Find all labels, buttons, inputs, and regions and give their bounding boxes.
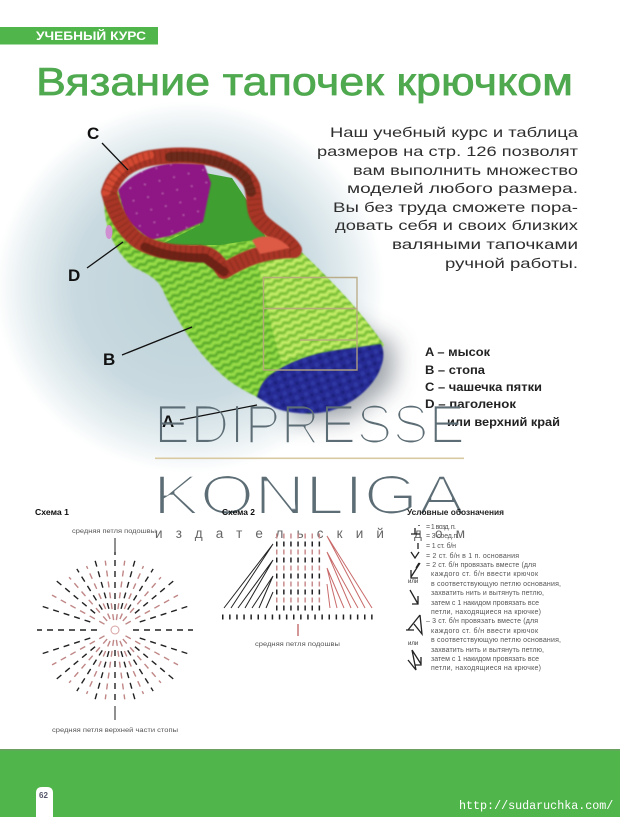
parts legend: A – мысок <box>425 345 491 359</box>
watermark square <box>264 278 357 370</box>
symbols legend: захватить нить и вытянуть петлю, <box>431 590 544 597</box>
symbols legend: = 2 ст. б/н в 1 п. основания <box>426 552 519 560</box>
callout D: D <box>68 266 80 285</box>
symbols legend: в соответствующую петлю основания, <box>431 581 561 588</box>
header tab: учебный курс <box>0 27 158 44</box>
parts legend: B – стопа <box>425 363 485 377</box>
callout C: C <box>87 124 99 143</box>
slipper illustration <box>104 155 395 420</box>
background glow behind slipper <box>0 101 385 473</box>
symbols legend: = 1 возд. п. <box>426 524 456 531</box>
slipper: blue toe <box>257 344 383 414</box>
symbols legend: или <box>408 641 418 647</box>
symbols legend: каждого ст. б/н ввести крючок <box>431 627 539 635</box>
schema 1: round chart: Схема 1 <box>35 508 70 517</box>
watermark subtitle: издательский дом <box>155 526 465 541</box>
slipper: inner green sole <box>160 172 266 245</box>
symbols legend: = 3 соед.п. <box>426 533 459 540</box>
symbols legend: затем с 1 накидом провязать все <box>431 600 539 607</box>
parts legend: или верхний край <box>447 415 560 429</box>
slipper: pink trim <box>106 225 112 239</box>
watermark KONLIGA: KONLIGA <box>153 463 466 526</box>
schema 1: round chart <box>35 508 193 734</box>
symbols legend: = 1 ст. б/н <box>426 542 456 550</box>
symbols legend: петли, находящиеся на крючке) <box>431 665 541 672</box>
slipper: front rim highlight <box>252 236 290 254</box>
symbols legend: Условные обозначения <box>407 508 504 517</box>
schema 2: trapezoid chart: Схема 2 <box>222 508 256 517</box>
intro text block: Вы без труда сможете пора- <box>333 199 578 215</box>
callout B <box>103 327 192 369</box>
intro text block: вам выполнить множество <box>353 162 578 178</box>
symbols legend: = 2 ст. б/н провязать вместе (для <box>426 561 536 569</box>
symbols legend <box>406 508 561 672</box>
callout A <box>162 405 257 431</box>
intro text block: размеров на стр. 126 позволят <box>317 143 579 159</box>
slipper: red rim <box>106 155 294 272</box>
footer band <box>0 749 620 817</box>
source url: http://sudaruchka.com/ <box>459 799 613 813</box>
parts legend <box>425 345 560 429</box>
slipper: foot body <box>104 190 384 414</box>
intro text block: моделей любого размера. <box>347 180 578 196</box>
callout A: A <box>162 412 174 431</box>
symbols legend: затем с 1 накидом провязать все <box>431 656 539 663</box>
slipper: inner magenta sole <box>118 163 211 240</box>
callout D <box>68 242 123 285</box>
symbols legend: – 3 ст. б/н провязать вместе (для <box>426 617 538 625</box>
legend symbols <box>406 525 422 670</box>
symbols legend: захватить нить и вытянуть петлю, <box>431 647 544 654</box>
schema 1: round chart: средняя петля подошвы <box>72 528 156 535</box>
title: Вязание тапочек крючком <box>36 61 573 104</box>
schema 1: round chart: средняя петля верхней части стопы <box>52 726 178 734</box>
intro text block: валяными тапочками <box>392 236 578 252</box>
callout B: B <box>103 350 115 369</box>
intro text block: ручной работы. <box>445 255 578 271</box>
parts legend: D – паголенок <box>425 397 517 411</box>
symbols legend: в соответствующую петлю основания, <box>431 637 561 644</box>
slipper: light stripe <box>258 253 381 362</box>
schema 2: trapezoid chart <box>222 508 376 648</box>
intro text block: довать себя и своих близких <box>335 217 578 233</box>
schema 2: trapezoid chart: средняя петля подошвы <box>255 641 340 648</box>
callout C <box>87 124 128 170</box>
header tab: учебный курс: УЧЕБНЫЙ КУРС <box>36 30 146 43</box>
symbols legend: каждого ст. б/н ввести крючок <box>431 570 539 578</box>
watermark divider <box>155 458 464 459</box>
page number tab <box>36 787 53 817</box>
symbols legend: петли, находящиеся на крючке) <box>431 609 541 616</box>
watermark EDIPRESSE: EDIPRESSE <box>154 393 465 455</box>
symbols legend: или <box>408 579 418 585</box>
page number tab: 62 <box>39 791 48 800</box>
intro text block <box>317 124 579 271</box>
intro text block: Наш учебный курс и таблица <box>330 124 578 140</box>
parts legend: C – чашечка пятки <box>425 380 542 394</box>
